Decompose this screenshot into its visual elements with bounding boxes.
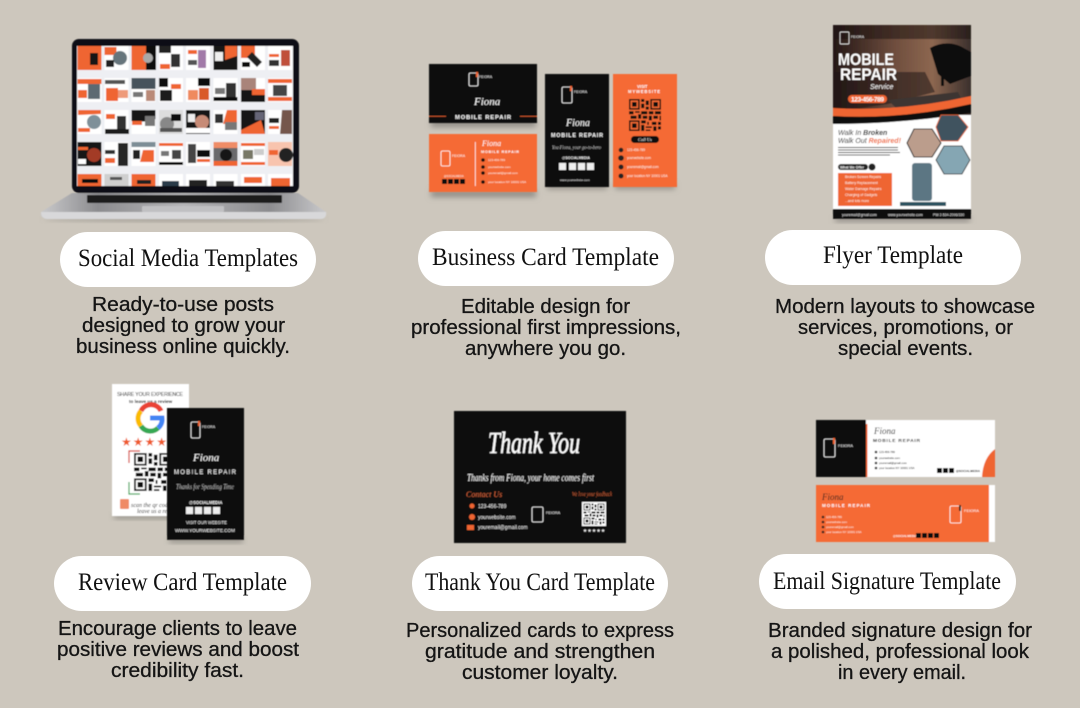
email signature: white: youremail@gmail.com [879, 461, 907, 465]
email signature: orange: MOBILE REPAIR [822, 503, 871, 508]
review card: white Google review front: scan the qr code and [131, 503, 182, 509]
business card: black portrait: You Fiona, your go-to-hero [552, 146, 601, 151]
business card: black landscape front: FEIORA [479, 75, 493, 79]
thank you card: 123-456-789 [478, 504, 507, 510]
thank you card: yourwebsite.com [478, 515, 516, 521]
flyer mockup: Walk Out Repaired! [838, 138, 902, 145]
business card: black landscape front: Fiona [473, 96, 501, 108]
description: social media templates: Ready-to-use posts [92, 294, 274, 316]
flyer mockup: Water Damage Repairs [845, 187, 882, 191]
email signature: orange: @SOCIALMEDIA [893, 534, 918, 538]
email signature: orange: youremail@gmail.com [826, 525, 854, 529]
email signature: orange: yourwebsite.com [826, 520, 848, 524]
email signature: white: 123-456-789 [879, 450, 895, 454]
flyer mockup: PW 2-534-2096/330 [933, 213, 964, 217]
flyer mockup: Charging of Gadgets [845, 193, 878, 197]
business card: black portrait: FEIORA [574, 90, 588, 94]
flyer mockup: ...and lots more [845, 199, 869, 203]
heading pill: business card template: Business Card Template [432, 244, 659, 271]
heading pill: email signature template: Email Signature Template [773, 568, 1001, 595]
review card: white Google review front: to leave us a review [129, 399, 173, 404]
panel: email signature template [759, 420, 1032, 684]
description: flyer template: special events. [838, 338, 973, 360]
review card: white Google review front: ★★★★ [121, 435, 167, 449]
description: email signature template: in every email. [838, 662, 966, 684]
thank you card: FEIORA [546, 511, 561, 515]
heading pill: social media templates [60, 232, 316, 287]
email signature: orange: Fiona [821, 492, 844, 502]
business card: orange landscape back: FEIORA [452, 154, 466, 158]
heading pill: flyer template [765, 230, 1021, 285]
flyer mockup: REPAIR [840, 65, 897, 84]
flyer mockup: www.yourwebsite.com [888, 213, 923, 217]
description: flyer template: Modern layouts to showcase [775, 296, 1035, 318]
email signature: white: your location NY 10001 USA [879, 466, 915, 470]
flyer mockup: Walk In Broken [838, 130, 887, 137]
description: social media templates: designed to grow your [82, 315, 285, 337]
description: social media templates [76, 294, 290, 358]
review card: black front: Thanks for Spending Time [176, 483, 234, 491]
review card: white Google review front [112, 384, 189, 519]
heading pill: review card template: Review Card Template [78, 569, 287, 596]
business card: orange landscape back: Fiona [481, 139, 501, 148]
business card: orange landscape back: yourwebsite.com [488, 165, 511, 169]
review card: black front: VISIT OUR WEBSITE [186, 520, 227, 525]
thank you card: Thanks from Fiona, your home comes first [467, 473, 594, 484]
heading pill: email signature template [759, 554, 1016, 609]
business card: black portrait: www.yourwebsite.com [560, 178, 590, 182]
flyer mockup [833, 25, 971, 222]
email signature: orange: your location NY 10001 USA [826, 530, 862, 534]
review card: black front: WWW.YOURWEBSITE.COM [175, 528, 235, 534]
business card: orange portrait with QR: VISIT [637, 84, 648, 89]
email signature: orange: FEIORA [964, 508, 979, 513]
description: thank you card template: Personalized cards to express [406, 620, 674, 642]
business card: black portrait [545, 74, 609, 187]
review card: black front [167, 408, 244, 543]
review card: black front: @SOCIALMEDIA [189, 500, 222, 505]
thank you card: Contact Us [466, 490, 502, 499]
description: thank you card template: customer loyalty. [462, 662, 618, 684]
card shadows [431, 120, 675, 197]
email signature: white: MOBILE REPAIR [873, 438, 921, 444]
description: flyer template: services, promotions, or [798, 317, 1013, 339]
business card: orange landscape back: youremail@gmail.com [488, 171, 518, 175]
heading pill: thank you card template: Thank You Card Template [425, 569, 655, 596]
heading pill: thank you card template [412, 556, 668, 611]
icon: laptop mockup with template grid [41, 39, 326, 222]
description: review card template: Encourage clients to leave [58, 618, 297, 640]
business card: orange landscape back: @SOCIALMEDIA [444, 175, 464, 178]
heading pill: review card template [54, 556, 311, 611]
review card: black front: MOBILE REPAIR [174, 470, 237, 476]
email signature: orange: 123-456-789 [826, 515, 842, 519]
panel: social media templates [41, 39, 326, 358]
business card: orange portrait with QR: Call Us [638, 137, 652, 142]
panel: business card template [411, 64, 681, 360]
description: business card template [411, 296, 681, 360]
email signature: orange [816, 485, 995, 542]
business card: orange portrait with QR: youremail@gmail.com [627, 165, 659, 169]
email signature: white: @SOCIALMEDIA [956, 469, 981, 473]
thank you card: Thank You [488, 425, 580, 460]
review card: black front: Fiona [192, 452, 220, 464]
thank you card: youremail@gmail.com [478, 525, 528, 531]
business card: orange landscape back: 123-456-789 [488, 158, 505, 162]
panel: flyer template [765, 25, 1035, 360]
description: review card template: credibility fast. [111, 660, 244, 682]
email signature: white: yourwebsite.com [879, 456, 901, 460]
description: email signature template: a polished, professional look [771, 641, 1030, 663]
business card: black portrait: @SOCIALMEDIA [562, 156, 590, 160]
description: review card template: positive reviews and boost [57, 639, 299, 661]
flyer mockup: 123-456-789 [851, 96, 884, 104]
business card: orange portrait with QR [613, 74, 677, 187]
business card: orange landscape back [429, 134, 537, 192]
review card: white Google review front: leave us a review [137, 509, 178, 515]
business card: orange landscape back: MOBILE REPAIR [481, 150, 519, 154]
panel: review card template [54, 384, 311, 682]
email signature: white: Fiona [873, 426, 896, 436]
business card: black landscape front: MOBILE REPAIR [455, 115, 512, 121]
flyer mockup: MOBILE [838, 50, 894, 69]
description: email signature template [768, 620, 1032, 684]
description: thank you card template: gratitude and strengthen [425, 641, 655, 663]
flyer mockup: FEIORA [851, 35, 865, 39]
business card: black portrait: Fiona [565, 118, 590, 129]
description: review card template [57, 618, 299, 682]
description: business card template: Editable design for [461, 296, 630, 318]
thank you card [454, 411, 626, 543]
business card: orange landscape back: your location NY 10001 USA [488, 180, 526, 184]
description: business card template: anywhere you go. [465, 338, 626, 360]
business card: black portrait: MOBILE REPAIR [551, 133, 603, 139]
flyer mockup: Battery Replacement [845, 181, 878, 185]
panel: thank you card template [406, 411, 674, 684]
thank you card: ★★★★★ [583, 528, 605, 534]
flyer mockup: Broken Screen Repairs [845, 175, 881, 179]
business card: orange portrait with QR: your location NY 10001 USA [627, 174, 668, 178]
email signature: white: FEIORA [838, 443, 853, 448]
flyer mockup: youremail@gmail.com [842, 213, 877, 217]
description: social media templates: business online quickly. [76, 336, 290, 358]
description: flyer template [775, 296, 1035, 360]
business card: orange portrait with QR: yourwebsite.com [627, 156, 651, 160]
business card: black landscape front [429, 64, 537, 123]
thank you card: We love your feedback [572, 491, 612, 498]
heading pill: flyer template: Flyer Template [823, 242, 963, 269]
description: business card template: professional first impressions, [411, 317, 681, 339]
flyer mockup: What We Offer [840, 166, 865, 170]
description: email signature template: Branded signature design for [768, 620, 1032, 642]
business card: orange portrait with QR: MYWEBSITE [628, 89, 660, 94]
review card: black front: FEIORA [202, 425, 216, 429]
description: thank you card template [406, 620, 674, 684]
heading pill: social media templates: Social Media Templates [78, 245, 298, 272]
review card: white Google review front: SHARE YOUR EXPERIENCE [117, 392, 184, 398]
heading pill: business card template [418, 231, 674, 286]
flyer mockup: Service [870, 84, 893, 91]
business card: orange portrait with QR: 123-456-789 [627, 148, 645, 152]
email signature: white [816, 420, 995, 477]
